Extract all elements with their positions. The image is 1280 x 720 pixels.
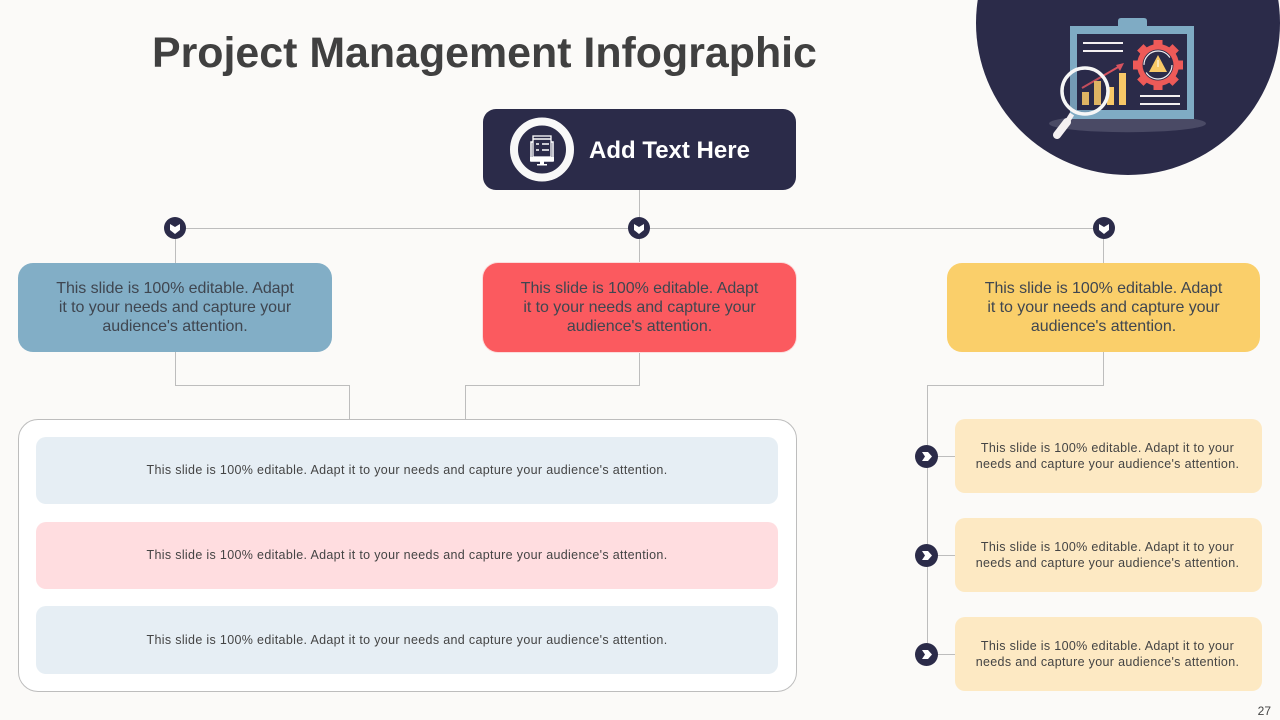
marker: side 3 — [915, 643, 938, 666]
row 3 — [36, 606, 778, 674]
card: blue — [18, 263, 332, 352]
row 1: This slide is 100% editable. Adapt it to your needs and capture your audience's attention. — [146, 463, 668, 477]
side card 3 — [955, 617, 1262, 691]
side card 1: This slide is 100% editable. Adapt it to your needs and capture your audience's attention. — [976, 441, 1239, 471]
page number: 27 — [1258, 704, 1271, 718]
card: blue: it to your needs and capture your — [59, 299, 291, 316]
top node: Add Text Here — [483, 109, 796, 190]
card: red: This slide is 100% editable. Adapt — [521, 280, 758, 297]
card: blue: This slide is 100% editable. Adapt — [56, 280, 294, 297]
card: yellow: audience's attention. — [1031, 318, 1176, 335]
card: yellow: it to your needs and capture your — [987, 299, 1220, 316]
side card 1 — [955, 419, 1262, 493]
card: yellow — [947, 263, 1260, 352]
row 2: This slide is 100% editable. Adapt it to your needs and capture your audience's attention. — [146, 548, 668, 562]
marker: side 1 — [915, 445, 938, 468]
side card 2: This slide is 100% editable. Adapt it to your needs and capture your audience's attention. — [976, 540, 1239, 570]
side card 3: This slide is 100% editable. Adapt it to your needs and capture your audience's attention. — [976, 639, 1239, 669]
marker: left chevron — [164, 217, 186, 239]
card: red — [483, 263, 796, 352]
node label: Add Text Here — [589, 137, 750, 164]
marker: right chevron — [1093, 217, 1115, 239]
card: red: it to your needs and capture your — [523, 299, 756, 316]
panel: stacked rows — [18, 419, 797, 692]
side card 2 — [955, 518, 1262, 592]
row 1 — [36, 437, 778, 504]
marker: side 2 — [915, 544, 938, 567]
marker: centre chevron — [628, 217, 650, 239]
card: red: audience's attention. — [567, 318, 712, 335]
row 2 — [36, 522, 778, 589]
row 3: This slide is 100% editable. Adapt it to your needs and capture your audience's attention. — [146, 632, 668, 646]
title: Project Management Infographic — [152, 29, 817, 77]
illustration: project dashboard in dark circle — [976, 0, 1280, 175]
icon: computer checklist — [510, 118, 574, 182]
card: yellow: This slide is 100% editable. Adapt — [985, 280, 1222, 297]
card: blue: audience's attention. — [102, 318, 248, 335]
